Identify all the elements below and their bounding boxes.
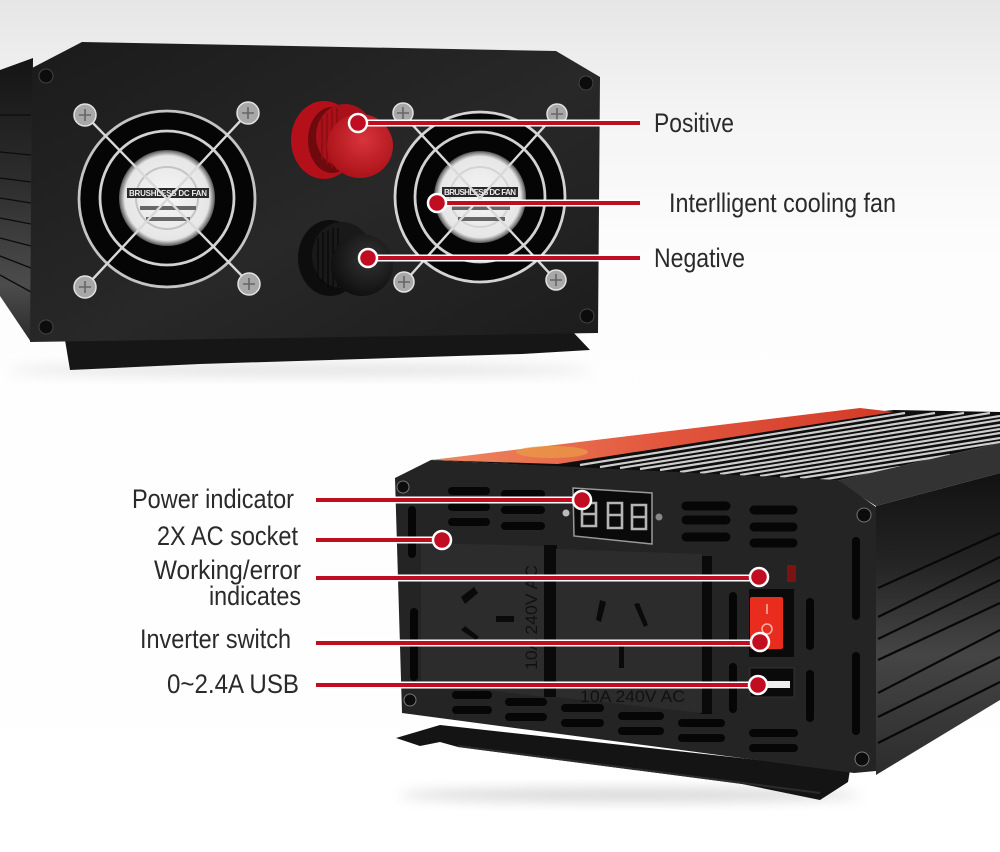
- icon: right cooling fan: [393, 103, 567, 292]
- icon: negative terminal: [298, 220, 393, 296]
- callout: positive: Positive: [654, 108, 734, 138]
- callout: inverter switch: Inverter switch: [140, 624, 291, 654]
- panel: rear view of inverter: [0, 42, 896, 376]
- callout: AC socket: 2X AC socket: [157, 521, 298, 551]
- icon: right cooling fan: BRUSHLESS DC FAN: [444, 188, 516, 197]
- callout: USB: 0~2.4A USB: [167, 669, 299, 699]
- mounting bracket: [65, 331, 590, 370]
- top surface with fins: [431, 410, 1000, 481]
- digital display: [562, 488, 662, 544]
- shadow under front view: [400, 788, 860, 802]
- indicator LED: [787, 565, 796, 582]
- callout: power indicator: [132, 484, 591, 514]
- callout: inverter switch: [140, 624, 769, 654]
- socket: left AC socket: 10A 240V AC: [522, 565, 541, 670]
- inverter rocker switch: [749, 589, 794, 657]
- socket: right AC socket: [556, 549, 712, 714]
- corner screws: [397, 481, 871, 766]
- callout: working/error indicates: [154, 555, 768, 611]
- callout: AC socket: [157, 521, 451, 551]
- callout: power indicator: Power indicator: [132, 484, 294, 514]
- vent slots: [412, 491, 856, 748]
- callout: working/error indicates: Working/error: [154, 555, 301, 585]
- inverter side with fins: [836, 443, 1000, 775]
- callout: USB: [167, 669, 767, 699]
- label on top surface: [431, 408, 894, 464]
- callout: negative: Negative: [654, 243, 745, 273]
- panel: front view of inverter: [132, 408, 1000, 802]
- inverter side body: [0, 58, 33, 342]
- socket: right AC socket: 10A 240V AC: [580, 687, 685, 706]
- front plate: [395, 460, 876, 773]
- rear plate: [30, 42, 600, 342]
- callout: cooling fan: [428, 188, 896, 218]
- callout: negative: [359, 243, 745, 273]
- socket: left AC socket: [421, 543, 557, 697]
- shadow under rear view: [10, 364, 590, 376]
- icon: left cooling fan: [74, 102, 260, 298]
- callout: positive: [349, 108, 734, 138]
- mounting bracket: [396, 725, 850, 800]
- icon: left cooling fan: BRUSHLESS DC FAN: [129, 189, 207, 198]
- icon: positive terminal: [291, 101, 393, 179]
- callout: cooling fan: Interlligent cooling fan: [669, 188, 896, 218]
- callout: working/error indicates: indicates: [209, 581, 301, 611]
- corner screws: [39, 69, 594, 334]
- USB port: [750, 668, 794, 697]
